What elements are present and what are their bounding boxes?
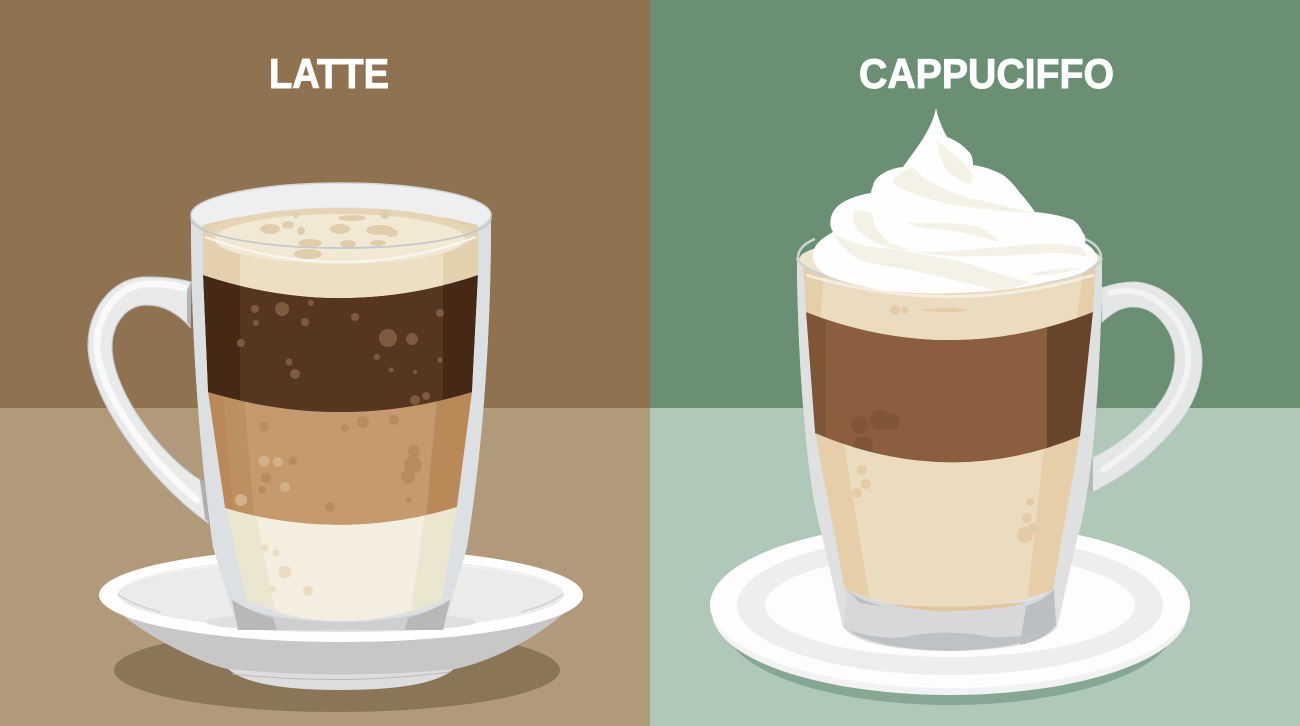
whipped cream bbox=[813, 108, 1097, 293]
latte saucer shadow bbox=[114, 628, 560, 712]
dark coffee layer bbox=[203, 275, 478, 412]
panel: latte background bbox=[0, 0, 650, 726]
glass walls bbox=[191, 218, 249, 630]
milk layer bbox=[226, 507, 456, 621]
glass body bbox=[797, 258, 1102, 651]
milk bottom edge bbox=[866, 603, 1025, 610]
foam layer bbox=[203, 208, 478, 298]
title: cappuciffo: CAPPUCIFFO bbox=[859, 50, 1114, 97]
cappuccino cup bbox=[797, 236, 1102, 651]
foam layer bbox=[804, 267, 1096, 340]
glass base bbox=[844, 589, 1056, 651]
latte cup bbox=[191, 183, 491, 630]
glass walls bbox=[797, 258, 852, 627]
coffee layer bbox=[806, 312, 1093, 462]
rim highlight bbox=[191, 218, 491, 248]
milk layer bbox=[814, 428, 1080, 606]
title: latte: LATTE bbox=[269, 50, 389, 97]
glass body bbox=[191, 218, 491, 630]
medium coffee layer bbox=[208, 385, 472, 525]
panel: cappuccino background bbox=[650, 0, 1300, 726]
latte saucer bbox=[99, 548, 583, 690]
cappuccino saucer shadow bbox=[725, 545, 1175, 705]
rim bbox=[798, 239, 815, 258]
foam surface bbox=[207, 208, 473, 264]
latte handle bbox=[88, 277, 209, 523]
cappuccino saucer bbox=[710, 522, 1190, 695]
glass base bbox=[232, 600, 450, 630]
cappuccino handle bbox=[1086, 282, 1202, 492]
rim back bbox=[191, 183, 491, 247]
